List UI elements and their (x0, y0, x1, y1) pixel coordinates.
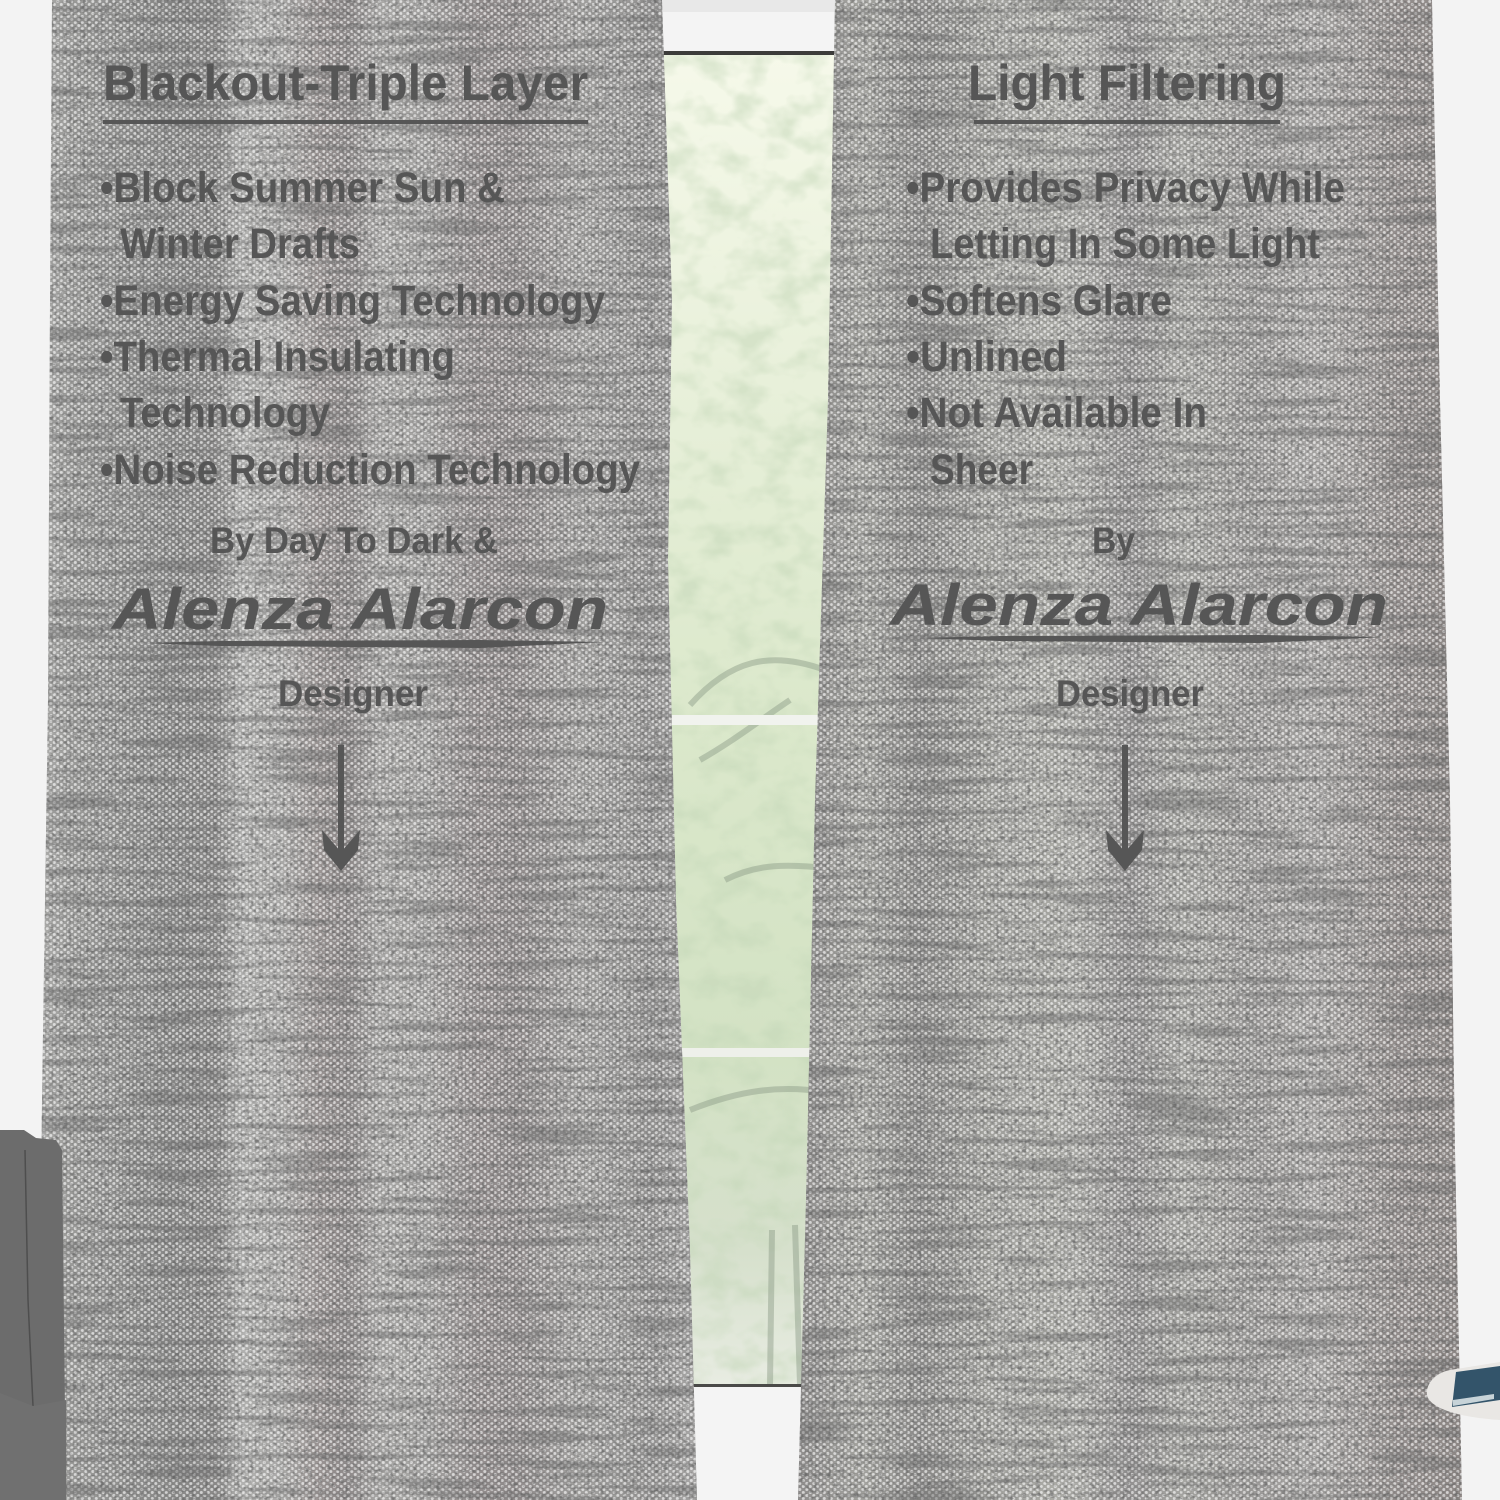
byline: By Day To Dark & (210, 520, 498, 561)
panel: blackout text column (100, 55, 640, 871)
window (655, 0, 840, 1500)
heading underline (103, 120, 588, 124)
feature list: •Softens Glare (906, 277, 1172, 325)
feature list: •Provides Privacy While (906, 164, 1345, 212)
signature underline (920, 635, 1385, 643)
feature list: •Energy Saving Technology (100, 277, 605, 325)
feature list (906, 164, 1345, 494)
feature list: •Thermal Insulating (100, 333, 455, 381)
panel: left curtain fabric (30, 0, 710, 1500)
feature list: Winter Drafts (120, 220, 360, 268)
heading: Blackout-Triple Layer: Blackout-Triple Layer (103, 55, 588, 111)
feature list: Sheer (930, 446, 1033, 494)
feature list (100, 164, 640, 494)
heading: Light Filtering: Light Filtering (968, 55, 1286, 111)
signature: Alenza Alarcon: Alenza Alarcon (110, 577, 608, 642)
signature: Alenza Alarcon: Alenza Alarcon (888, 573, 1388, 638)
armchair (0, 1130, 66, 1500)
feature list: Technology (120, 389, 330, 437)
panel: light filtering text column (888, 55, 1388, 871)
arrow: down (322, 745, 360, 871)
panel: right curtain fabric (790, 0, 1470, 1500)
feature list: •Not Available In (906, 389, 1207, 437)
feature list: •Noise Reduction Technology (100, 446, 640, 494)
label: Designer: Designer (1056, 673, 1204, 714)
arrow: down (1106, 745, 1144, 871)
label: Designer: Designer (278, 673, 428, 714)
signature underline (142, 640, 605, 648)
byline: By (1092, 520, 1135, 561)
side table with book (1427, 1362, 1500, 1420)
feature list: •Unlined (906, 333, 1067, 381)
heading underline (974, 120, 1280, 124)
feature list: Letting In Some Light (930, 220, 1320, 268)
feature list: •Block Summer Sun & (100, 164, 505, 212)
